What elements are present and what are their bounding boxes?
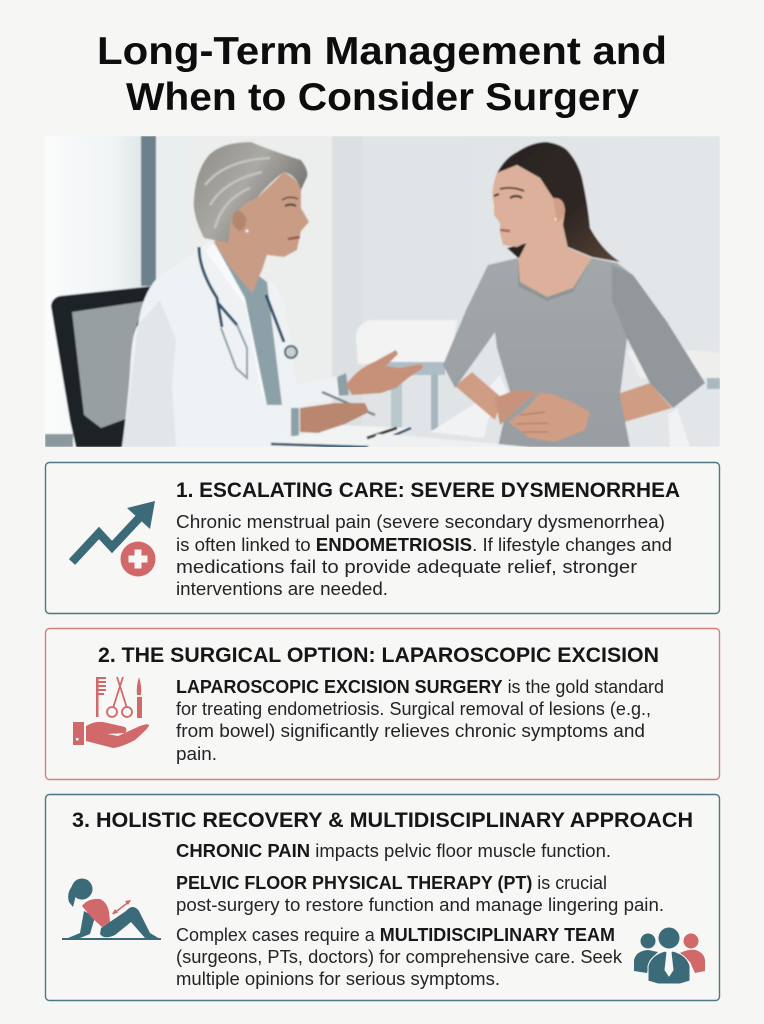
shirt xyxy=(214,242,282,405)
exam bed xyxy=(356,320,720,430)
body text xyxy=(176,512,672,599)
hair xyxy=(497,142,620,262)
grey top xyxy=(443,258,632,447)
photo: doctor consulting with patient xyxy=(45,136,720,447)
panel: surgical option xyxy=(46,628,720,780)
body text xyxy=(176,841,664,989)
pen xyxy=(322,392,375,415)
white coat xyxy=(120,279,343,447)
stethoscope xyxy=(199,247,284,342)
panel: escalating care xyxy=(46,462,720,614)
title xyxy=(97,30,667,119)
heading: 3. HOLISTIC RECOVERY & MULTIDISCIPLINARY APPROACH xyxy=(72,809,693,832)
body text: CHRONIC PAIN impacts pelvic floor muscle function. xyxy=(176,841,611,861)
title: Long-Term Management and xyxy=(97,30,667,73)
icon: multidisciplinary team xyxy=(634,927,705,984)
white chair xyxy=(430,375,690,447)
office chair xyxy=(50,285,152,447)
body text: is often linked to ENDOMETRIOSIS . If lifestyle changes and xyxy=(176,535,672,555)
body text: PELVIC FLOOR PHYSICAL THERAPY (PT) is crucial xyxy=(176,873,607,893)
doctor xyxy=(122,142,423,447)
writing hand xyxy=(300,403,369,433)
hair xyxy=(194,142,307,243)
panel: holistic recovery xyxy=(46,794,720,1000)
neck and face xyxy=(214,172,309,293)
patient facial features xyxy=(494,188,565,231)
doctor facial features xyxy=(282,197,300,239)
title: When to Consider Surgery xyxy=(126,76,639,119)
face and neck xyxy=(493,165,592,297)
desk xyxy=(367,434,530,447)
body text: Chronic menstrual pain (severe secondary dysmenorrhea) xyxy=(176,512,665,532)
clipboard xyxy=(296,425,406,446)
body text: medications fail to provide adequate relief, stronger xyxy=(176,557,637,577)
icon: rising arrow with medical cross xyxy=(72,501,156,576)
body text: post-surgery to restore function and manage lingering pain. xyxy=(176,895,664,915)
icon: surgical tools over hand xyxy=(73,677,149,748)
body text xyxy=(176,677,664,764)
body text: from bowel) significantly relieves chronic symptoms and xyxy=(176,721,645,741)
body text: (surgeons, PTs, doctors) for comprehensive care. Seek xyxy=(176,947,623,967)
body text: multiple opinions for serious symptoms. xyxy=(176,969,500,989)
hands on abdomen xyxy=(495,390,590,442)
gesturing hand xyxy=(346,350,423,395)
body text: for treating endometriosis. Surgical removal of lesions (e.g., xyxy=(176,699,651,719)
body text: LAPAROSCOPIC EXCISION SURGERY is the gold standard xyxy=(176,677,664,697)
heading: 2. THE SURGICAL OPTION: LAPAROSCOPIC EXCISION xyxy=(98,644,659,667)
body text: Complex cases require a MULTIDISCIPLINARY TEAM xyxy=(176,925,615,945)
body text: pain. xyxy=(176,744,217,764)
icon: woman doing pelvic floor exercise xyxy=(62,878,161,940)
patient xyxy=(430,142,705,447)
heading: 1. ESCALATING CARE: SEVERE DYSMENORRHEA xyxy=(176,479,680,502)
body text: interventions are needed. xyxy=(176,579,388,599)
forearms xyxy=(456,372,672,422)
